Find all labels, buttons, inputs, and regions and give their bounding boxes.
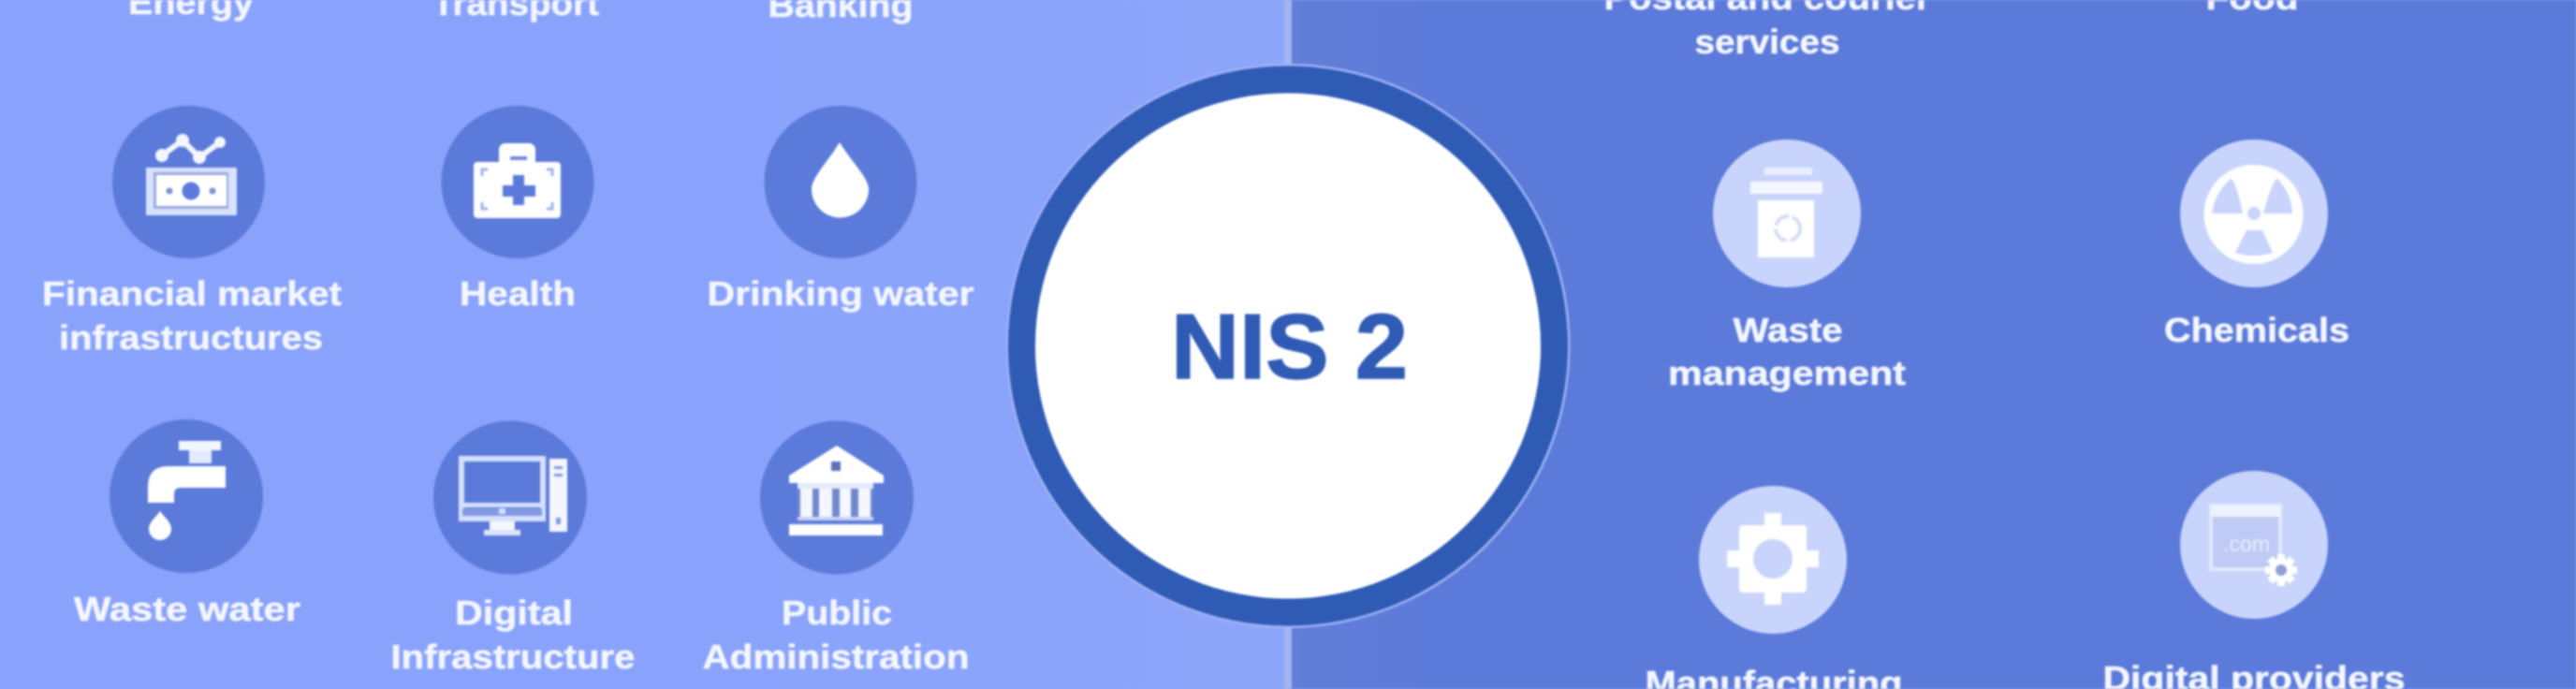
center divider — [1284, 0, 1292, 689]
icon: dripping tap — [110, 419, 263, 573]
label: Infrastructure: Infrastructure — [391, 638, 635, 676]
icon: water drop — [764, 106, 917, 258]
icon: first aid kit — [442, 106, 593, 258]
icon: desktop computer — [433, 421, 587, 575]
icon: radiation symbol — [2180, 139, 2328, 287]
label: Administration: Administration — [702, 638, 970, 676]
item: Manufacturing — [1646, 486, 1902, 689]
label: services: services — [1694, 22, 1840, 61]
item: Public Administration — [702, 421, 970, 676]
label: infrastructures: infrastructures — [59, 318, 323, 357]
label: Chemicals: Chemicals — [2164, 311, 2349, 349]
item: Digital infrastructure — [391, 421, 635, 676]
icon: web window with gear — [2180, 471, 2328, 619]
icon: money and chart — [112, 106, 265, 258]
item: Digital providers — [2102, 471, 2406, 689]
label: Waste: Waste — [1734, 311, 1842, 349]
label: Public: Public — [782, 594, 892, 632]
label: Financial market: Financial market — [42, 274, 342, 313]
title: NIS 2: NIS 2 — [1171, 295, 1408, 398]
label: Waste water: Waste water — [74, 590, 300, 628]
icon: web window with gear: .com — [2223, 532, 2270, 556]
item: Waste water — [74, 419, 300, 628]
label: Health: Health — [460, 274, 576, 313]
center badge: NIS 2 — [1005, 64, 1571, 628]
label: Digital: Digital — [455, 594, 573, 632]
item: Health — [442, 106, 593, 313]
icon: government building — [760, 421, 914, 575]
item: Financial market infrastructures — [42, 106, 342, 357]
icon: gear — [1699, 486, 1847, 634]
item: Chemicals — [2164, 139, 2349, 349]
panel: essential sectors (left) — [0, 0, 1285, 689]
item: Drinking water — [708, 106, 973, 313]
icon: recycling bin — [1713, 139, 1861, 287]
item: Waste management — [1668, 139, 1906, 392]
label: management: management — [1668, 354, 1906, 392]
label: Drinking water: Drinking water — [708, 274, 973, 313]
panel: important sectors (right) — [1291, 0, 2576, 689]
